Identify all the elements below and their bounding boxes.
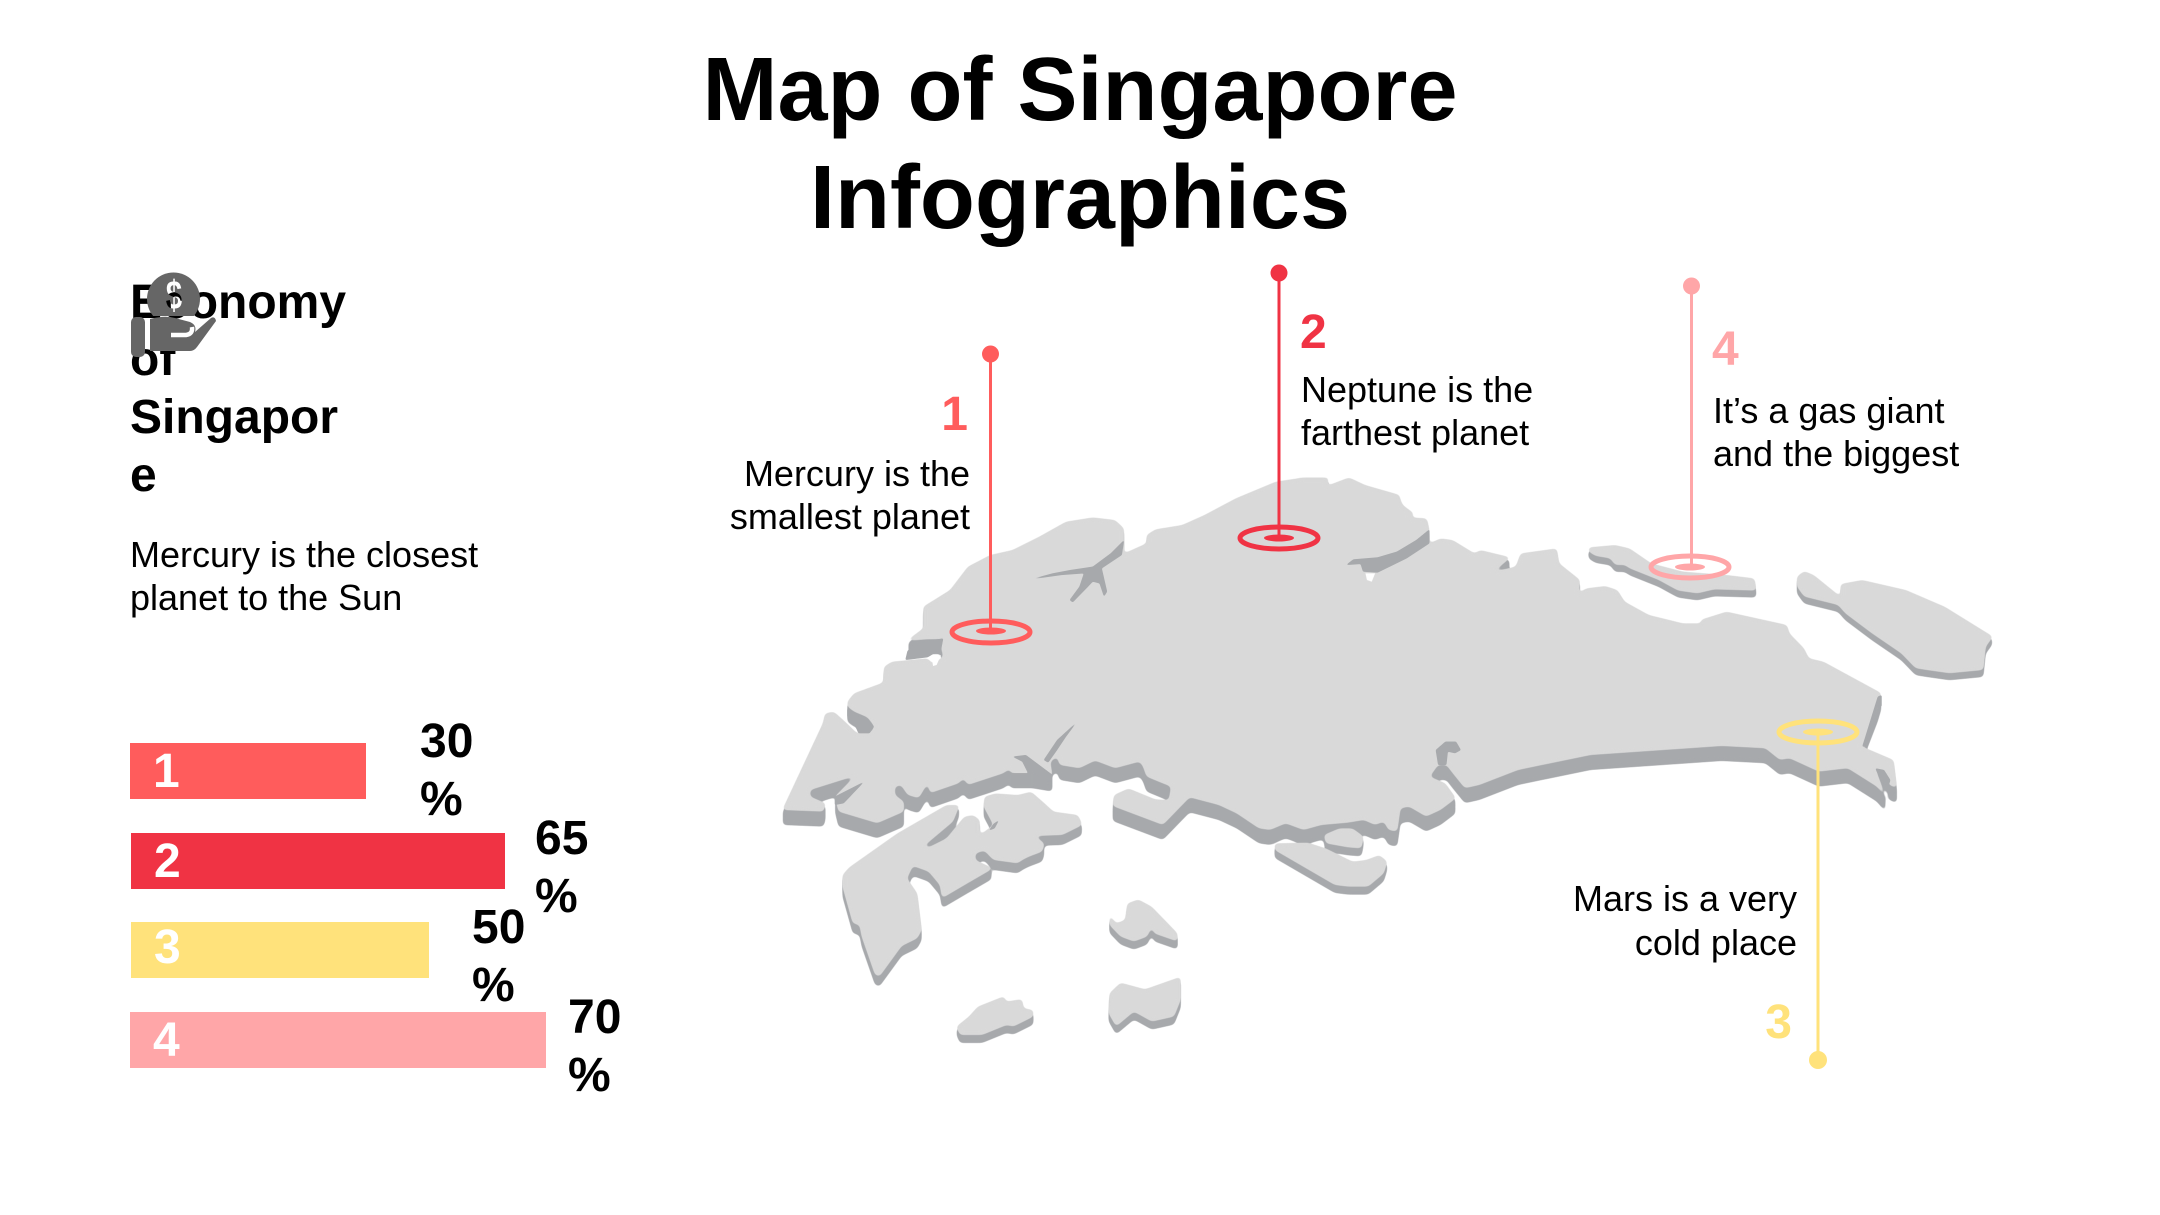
callout 2 text: farthest planet xyxy=(1301,412,1529,453)
heading: economy of Singapore: e xyxy=(130,449,157,502)
map extrusion shadow xyxy=(782,481,1993,1043)
title: Map of Singapore xyxy=(702,40,1458,140)
callout 1 number: 1 xyxy=(941,388,968,441)
callout 1 text: Mercury is the xyxy=(744,453,970,494)
callout 4 number: 4 xyxy=(1712,323,1739,376)
pin 3 xyxy=(1779,721,1857,1069)
bar 1: 30% xyxy=(130,715,473,826)
callout 2: Neptune xyxy=(1240,264,1533,549)
bar 1: 30%: 1 xyxy=(153,745,180,798)
bar 3: 50%: % xyxy=(472,959,515,1012)
bar 4: 70%: 70 xyxy=(568,991,621,1044)
callout 2 text xyxy=(1301,369,1533,453)
isometric map of Singapore xyxy=(782,478,1993,1043)
bar 1: 30%: 30 xyxy=(420,715,473,768)
bar 3: 50% xyxy=(131,901,525,1012)
callout 1: Mercury xyxy=(730,346,1030,643)
bar 3: 50%: 3 xyxy=(154,921,181,974)
callout 2 text: Neptune is the xyxy=(1301,369,1533,410)
bar 2: 65% xyxy=(131,812,588,923)
heading: economy of Singapore xyxy=(130,276,346,502)
title xyxy=(702,40,1458,248)
bar 2: 65%: 65 xyxy=(535,812,588,865)
title: Infographics xyxy=(810,148,1350,248)
callout 4 text xyxy=(1713,390,1959,474)
callout 3 text: Mars is a very xyxy=(1573,878,1797,919)
pin 1 xyxy=(952,346,1030,643)
bar 1: 30%: % xyxy=(420,773,463,826)
icon: hand holding coin xyxy=(131,272,216,357)
bar 4: 70%: % xyxy=(568,1049,611,1102)
map inlets and rivers xyxy=(835,529,1890,831)
bar 2: 65%: 2 xyxy=(154,835,181,888)
description text: Mercury is the closest xyxy=(130,534,478,575)
description text: planet to the Sun xyxy=(130,577,402,618)
bar 2: 65%: % xyxy=(535,870,578,923)
map top surface xyxy=(782,478,1993,1035)
heading: economy of Singapore: Singapor xyxy=(130,391,338,444)
bar 3: 50%: 50 xyxy=(472,901,525,954)
callout 4: Jupiter xyxy=(1651,278,1959,578)
callout 3 text xyxy=(1573,878,1797,963)
callout 3 number: 3 xyxy=(1765,996,1792,1049)
bar 4: 70%: 4 xyxy=(153,1014,180,1067)
callout 3: Mars xyxy=(1573,721,1857,1069)
callout 4 text: and the biggest xyxy=(1713,433,1959,474)
bar chart xyxy=(130,715,621,1102)
callout 4 text: It’s a gas giant xyxy=(1713,390,1944,431)
callout 2 number: 2 xyxy=(1300,306,1327,359)
description text xyxy=(130,534,478,618)
pin 4 xyxy=(1651,278,1729,578)
heading: economy of Singapore: Economy xyxy=(130,276,346,329)
callout 1 text: smallest planet xyxy=(730,496,970,537)
pin 2 xyxy=(1240,264,1318,549)
callout 3 text: cold place xyxy=(1635,922,1797,963)
callout 1 text xyxy=(730,453,970,537)
bar 4: 70% xyxy=(130,991,621,1102)
heading: economy of Singapore: of xyxy=(130,333,176,386)
map small white gaps xyxy=(932,573,1375,666)
